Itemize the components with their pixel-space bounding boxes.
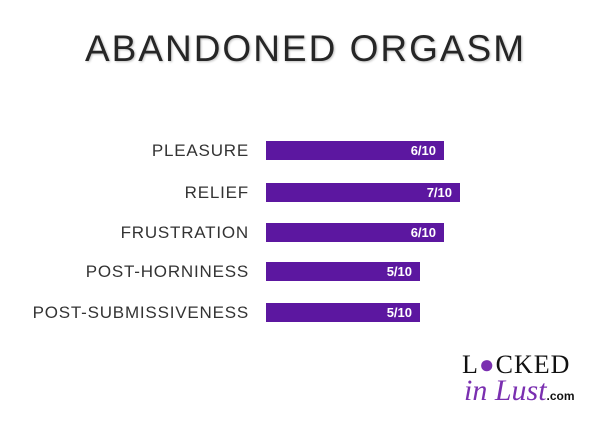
row: relief: RELIEF — [185, 183, 249, 202]
row: relief — [185, 183, 460, 202]
row: post-horniness: POST-HORNINESS — [86, 262, 249, 281]
row: post-submissiveness — [33, 303, 420, 322]
row: post-horniness — [86, 262, 420, 281]
title: ABANDONED ORGASM — [85, 28, 526, 69]
row: pleasure — [152, 141, 444, 160]
row: post-submissiveness: 5/10 — [387, 305, 412, 320]
logo — [462, 350, 575, 407]
logo: in Lust.com — [464, 374, 575, 407]
row: pleasure: PLEASURE — [152, 141, 249, 160]
logo: L●CKED — [462, 350, 570, 379]
row: frustration: 6/10 — [411, 225, 436, 240]
row: post-horniness: 5/10 — [387, 264, 412, 279]
row: relief: 7/10 — [427, 185, 452, 200]
row: pleasure: 6/10 — [411, 143, 436, 158]
row: post-submissiveness: POST-SUBMISSIVENESS — [33, 303, 249, 322]
row: frustration: FRUSTRATION — [121, 223, 249, 242]
row: frustration — [121, 223, 444, 242]
